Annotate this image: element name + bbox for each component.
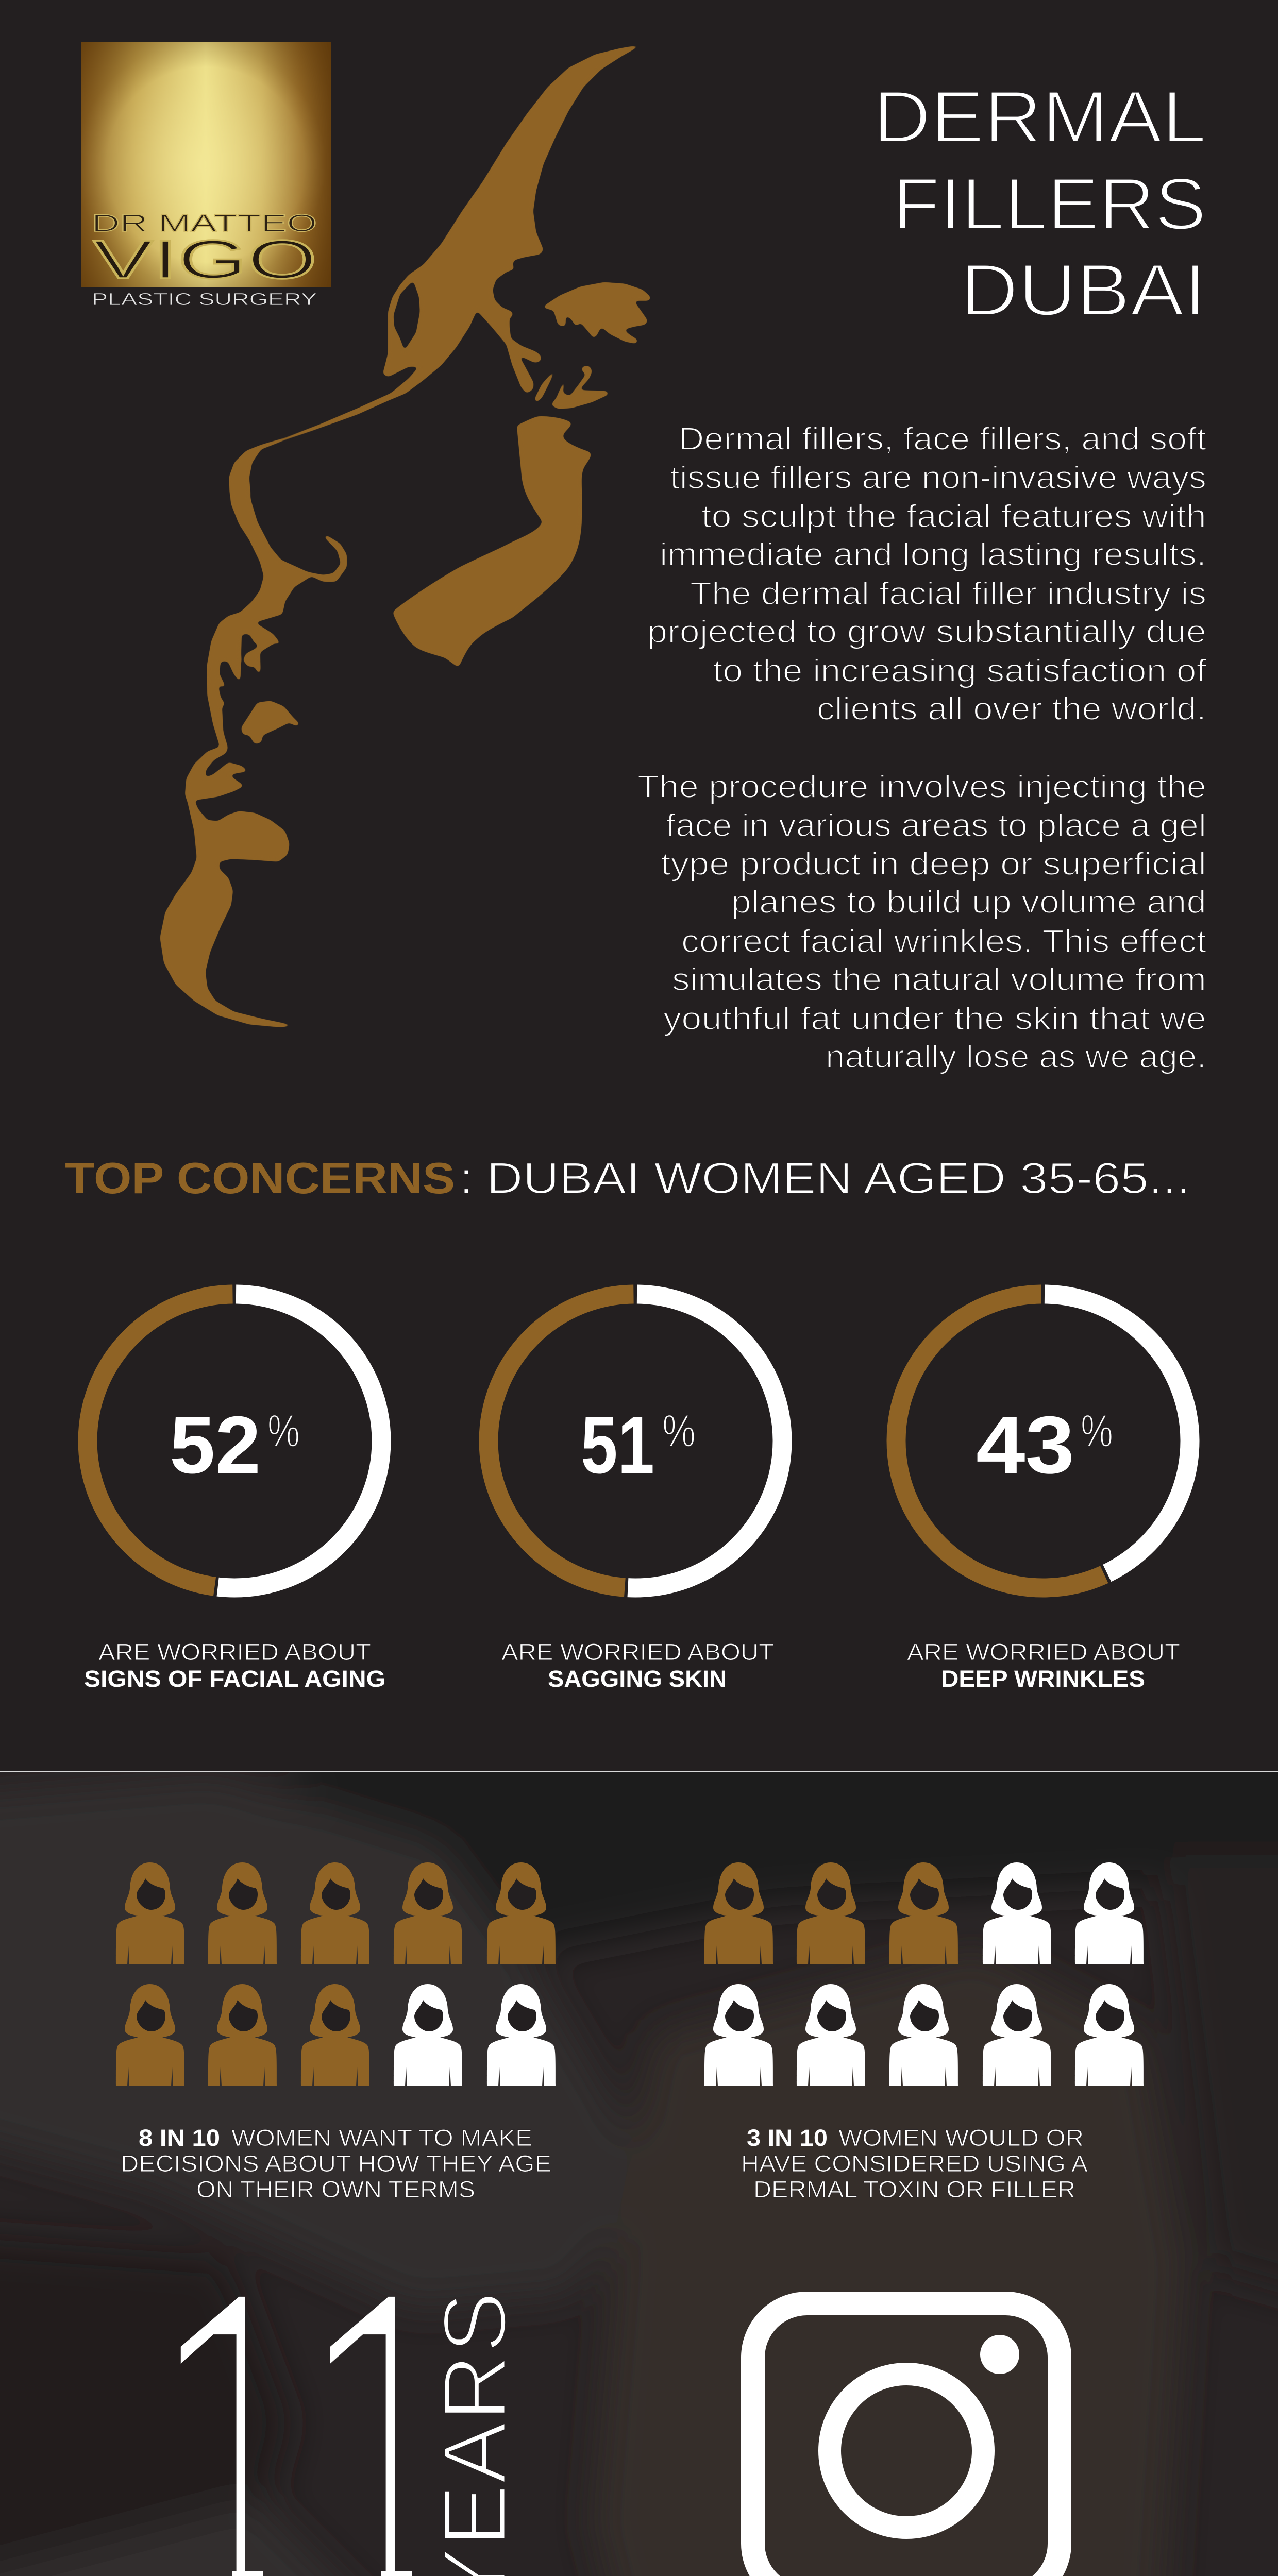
- intro paragraph 2: simulates the natural volume from: [672, 962, 1206, 997]
- caption: 3 in 10: 3 IN 10: [747, 2125, 828, 2151]
- heading: top concerns: TOP CONCERNS: [65, 1154, 455, 1203]
- donut chart 52%: [88, 1294, 381, 1588]
- intro paragraph 2: type product in deep or superficial: [661, 846, 1206, 882]
- value 43%: [976, 1400, 1113, 1490]
- label: [501, 1639, 774, 1692]
- caption: 3 in 10: WOMEN WOULD OR: [838, 2125, 1084, 2151]
- intro paragraph 2: naturally lose as we age.: [826, 1039, 1206, 1075]
- logo: Dr Matteo Vigo: DR MATTEO: [92, 209, 317, 236]
- title: DERMAL: [873, 76, 1206, 158]
- caption: 8 in 10: 8 IN 10: [139, 2125, 220, 2151]
- panel: concern 52%: [84, 1294, 385, 1692]
- intro paragraph 2: planes to build up volume and: [731, 885, 1206, 920]
- intro paragraph 1: clients all over the world.: [817, 691, 1206, 727]
- value 43%: %: [1081, 1405, 1113, 1456]
- donut chart 51%: [489, 1294, 782, 1588]
- label: ARE WORRIED ABOUT: [501, 1639, 774, 1665]
- pictogram: 3 in 10 women: [704, 1862, 1144, 2086]
- value 51%: %: [662, 1405, 696, 1456]
- value 52%: 52: [170, 1400, 261, 1490]
- caption: 8 in 10: [121, 2125, 551, 2202]
- big number: 11 years: [180, 2297, 505, 2576]
- intro paragraph 1: [647, 421, 1207, 727]
- intro paragraph 1: Dermal fillers, face fillers, and soft: [679, 421, 1206, 457]
- intro paragraph 1: tissue fillers are non-invasive ways: [670, 460, 1206, 496]
- logo: Dr Matteo Vigo: [81, 42, 331, 309]
- caption: 8 in 10: DECISIONS ABOUT HOW THEY AGE: [121, 2150, 551, 2177]
- intro paragraph 1: projected to grow substantially due: [647, 614, 1206, 650]
- intro paragraph 2: correct facial wrinkles. This effect: [681, 924, 1206, 959]
- value 52%: [170, 1400, 300, 1490]
- label: [907, 1639, 1180, 1692]
- intro paragraph 2: The procedure involves injecting the: [637, 769, 1206, 805]
- label: SAGGING SKIN: [548, 1666, 727, 1692]
- caption: 3 in 10: DERMAL TOXIN OR FILLER: [753, 2176, 1075, 2202]
- illustration: gold face silhouette: [160, 44, 651, 1027]
- background photo: blurred woman's face: [0, 1772, 1202, 2576]
- caption: 8 in 10: WOMEN WANT TO MAKE: [231, 2125, 532, 2151]
- caption: 3 in 10: HAVE CONSIDERED USING A: [741, 2150, 1088, 2177]
- logo: Dr Matteo Vigo: PLASTIC SURGERY: [92, 290, 317, 309]
- value 43%: 43: [976, 1400, 1074, 1490]
- divider: top of photo band: [0, 1771, 1278, 1772]
- title: FILLERS: [893, 163, 1206, 245]
- label: ARE WORRIED ABOUT: [98, 1639, 371, 1665]
- icon: instagram camera: [753, 2303, 1060, 2576]
- intro paragraph 1: to the increasing satisfaction of: [713, 653, 1207, 689]
- intro paragraph 1: The dermal facial filler industry is: [690, 576, 1206, 612]
- label: [84, 1639, 385, 1692]
- intro paragraph 2: face in various areas to place a gel: [666, 808, 1206, 843]
- intro paragraph 2: youthful fat under the skin that we: [663, 1001, 1206, 1037]
- pictogram: 8 in 10 women: [116, 1862, 556, 2086]
- label: SIGNS OF FACIAL AGING: [84, 1666, 385, 1692]
- title: DUBAI: [960, 249, 1206, 331]
- intro paragraph 1: to sculpt the facial features with: [701, 499, 1206, 534]
- value 52%: %: [267, 1405, 300, 1456]
- value 51%: 51: [581, 1400, 654, 1490]
- caption: 8 in 10: ON THEIR OWN TERMS: [196, 2176, 475, 2202]
- panel: concern 43%: [896, 1294, 1190, 1692]
- heading: top concerns: :: [460, 1154, 473, 1203]
- label: ARE WORRIED ABOUT: [907, 1639, 1180, 1665]
- intro paragraph 2: [637, 769, 1206, 1075]
- caption: 3 in 10: [741, 2125, 1088, 2202]
- heading: top concerns: [65, 1154, 1190, 1203]
- panel: concern 51%: [489, 1294, 782, 1692]
- intro paragraph 1: immediate and long lasting results.: [660, 537, 1206, 572]
- donut chart 43%: [896, 1294, 1190, 1588]
- heading: top concerns: DUBAI WOMEN AGED 35-65...: [486, 1154, 1190, 1203]
- logo: Dr Matteo Vigo: VIGO: [93, 229, 317, 290]
- title: [873, 76, 1206, 331]
- label: DEEP WRINKLES: [941, 1666, 1145, 1692]
